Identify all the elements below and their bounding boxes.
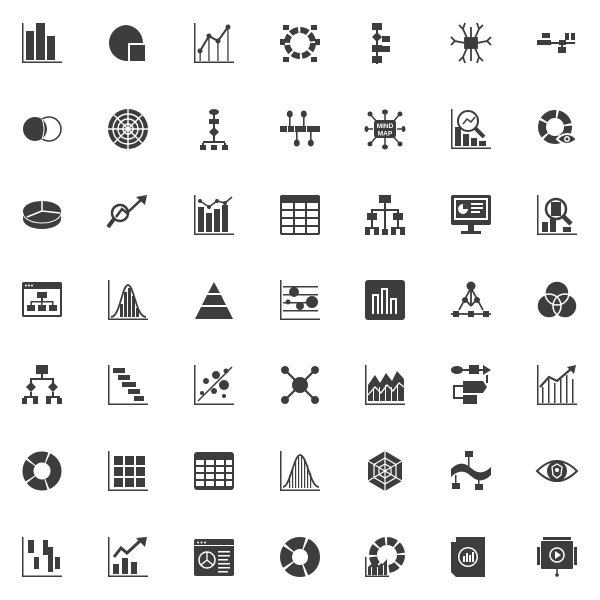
icon: circle chart combined	[365, 541, 401, 577]
icon: normal distribution	[280, 451, 320, 491]
icon: mind map	[364, 110, 406, 150]
icon: growth bar chart	[537, 365, 577, 405]
icon: analytics magnifier	[451, 109, 491, 149]
icon: three circle venn	[537, 281, 577, 318]
icon: bar and line chart	[194, 195, 234, 235]
icon: org tree two levels	[22, 365, 62, 404]
icon: network nodes	[281, 366, 319, 404]
icon: org chart	[365, 195, 405, 235]
icon: data table	[194, 452, 234, 490]
icon: donut with eye	[542, 114, 577, 144]
icon: vertical flowchart	[200, 109, 228, 150]
icon: line chart	[194, 23, 234, 63]
icon: process flow	[451, 365, 491, 404]
icon: bars with arrow	[108, 537, 148, 577]
icon: 3d pie	[23, 201, 61, 229]
icon: bubble chart	[280, 280, 320, 320]
icon: bar chart	[22, 23, 62, 63]
icon: area chart	[365, 365, 405, 405]
icon: thick donut	[286, 543, 314, 571]
icon: bar chart square	[365, 280, 405, 320]
icon: spider web hexagon	[368, 451, 402, 491]
icon: monitor chart	[451, 195, 491, 234]
icon: mind map: MIND	[377, 123, 394, 130]
icon: magnifier growth	[108, 195, 147, 227]
icon: radar circle	[108, 109, 148, 149]
icon: grid chart	[108, 451, 148, 491]
icon: pyramid	[195, 282, 233, 319]
icon: horizontal hierarchy	[537, 33, 575, 53]
icon: checklist table	[280, 195, 320, 235]
icon: timeline	[280, 110, 320, 146]
icon: eye with shield	[537, 461, 577, 481]
icon: venn two circles	[23, 117, 61, 141]
icon: pie chart	[109, 25, 145, 61]
icon: node tree	[451, 282, 491, 317]
icon: segmented donut	[28, 457, 56, 485]
icon: cycle diagram	[280, 25, 320, 62]
icon: gantt chart	[108, 365, 148, 405]
icon: scatter chart	[194, 365, 234, 405]
icon: candlestick chart	[22, 537, 62, 577]
icon: report magnifier	[537, 195, 577, 235]
icon: video presentation	[537, 537, 577, 577]
icon: bell curve bars	[108, 280, 148, 320]
icon: circuit tree	[451, 23, 491, 63]
icon: mind map: MAP	[378, 130, 393, 138]
icon: flowchart	[372, 23, 390, 64]
icon: roadmap	[451, 451, 491, 490]
icon: browser org chart	[22, 282, 62, 317]
icon: browser pie report	[194, 539, 234, 576]
icon: document magnifier	[451, 537, 485, 577]
